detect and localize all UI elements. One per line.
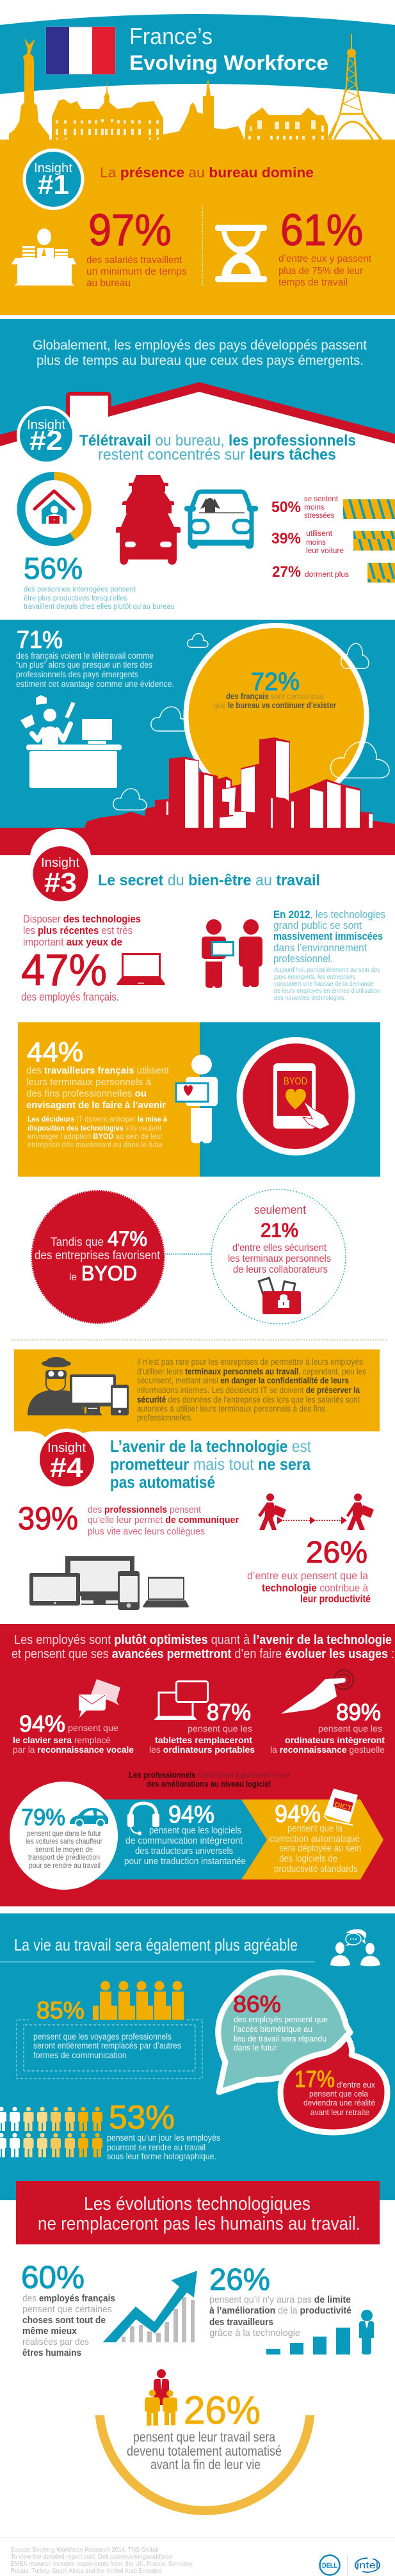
stat: 39% communicate faster: qu’elle leur permet de communiquer [88,1515,239,1525]
panel: insight 2 house [0,382,395,620]
speech bubble: 17% before retirement [280,2036,387,2132]
stat: 26% productivity [247,1536,371,1605]
statement text: plus de temps au bureau que ceux des pays émergents. [36,353,364,368]
icon: red cars in traffic [116,475,181,565]
stat: 26% productivity: technologie contribue à [262,1582,369,1594]
callout: only 21% secure devices: les terminaux personnels [228,1253,331,1264]
heading [79,432,356,463]
footer sources: To view the detailed report visit: Dell.com/evolvingworkforce [10,2554,173,2561]
stat: 94% translators: de communication intègreront [125,1835,243,1846]
stat: 44%: des fins professionnelles ou [26,1088,147,1099]
icon: dictionary [324,1789,358,1825]
stat: 87% tablets: tablettes remplaceront [155,1735,252,1745]
panel: global office time statement [0,319,395,447]
icon: dictionary: DICT [334,1801,353,1813]
stat: 47%: des employés français. [21,990,119,1003]
stat: 61%: d’entre eux y passent [278,254,372,264]
stat: 60% better done by humans: pensent que certaines [22,2304,112,2315]
callout: 79% driverless cars: 79% [21,1804,65,1830]
stat: 94% voice recognition: 94% [19,1711,65,1737]
heading: Télétravail ou bureau, les professionnels [79,432,356,449]
icon: BYOD phone in circle [239,1040,352,1152]
badge: insight 1 [23,149,85,210]
icon: travellers with suitcases [93,1981,184,2020]
text: latest technologies [23,913,141,948]
arc under stat [95,2415,315,2515]
stat: 94% autocorrect: 94% [275,1801,321,1828]
badge: insight 4 [36,1429,97,1490]
speech bubble: 17% before retirement: deviendra une réalité [303,2098,375,2107]
stat: 94% autocorrect: productivité standards [274,1864,358,1874]
stat: 94% translators: pour une traduction instantanée [124,1856,246,1867]
city skyline [0,737,395,855]
stat: 44%: 44% [27,1037,83,1068]
icon: message bubbles [79,1679,120,1718]
stat: 39% communicate faster: des professionnels pensent [88,1504,202,1515]
stat: 56%: travaillent depuis chez elles plutôt qu’au bureau [24,603,175,611]
text: software improvements [129,1771,290,1789]
stat: 85% business travel: formes de communication [33,2050,127,2060]
stat: 50% less stressed: stressées [304,512,334,520]
callout: 79% driverless cars: pour se rendre au travail [29,1861,101,1870]
stat: 94% translators: 94% [168,1801,214,1828]
panel: security warning [14,1349,380,1437]
icon: gesture touch [281,1670,353,1714]
text: 2012 consumer technologies: professionnel. [273,953,333,965]
badge: insight 2: #2 [29,426,63,456]
stat: 94% voice recognition: le clavier sera remplacé [13,1735,111,1745]
speech bubble: 86% biometric: des employés pensent que [234,2015,328,2024]
stat: 44%: envisagent de le faire à l’avenir [26,1100,166,1111]
stat: 71% [16,627,174,689]
stat: 60% better done by humans: réalisées par des [22,2337,89,2347]
stat: 87% tablets: pensent que les [188,1723,252,1734]
stat: 71%: professionnels des pays émergents [16,670,138,679]
icon: BYOD phone in circle: BYOD [284,1076,307,1087]
text: 2012 consumer technologies: des nouvelles technologies. [274,995,346,1002]
callout: 47% of companies favour BYOD: Tandis que [51,1236,104,1248]
stat: 27% sleep more [272,563,395,583]
stat: 85% business travel: pensent que les voyages professionnels [33,2032,172,2041]
speech bubble: 86% biometric: dans le futur [234,2043,277,2052]
callout: 47% of companies favour BYOD [32,1191,164,1323]
text: 2012 consumer technologies [273,908,385,1002]
title: France’s [129,23,213,49]
icon: device set [29,1556,189,1610]
callout: 79% driverless cars: pensent que dans le futur [27,1829,101,1838]
stat: 94% voice recognition: pensent que [68,1723,118,1733]
clouds [113,634,389,810]
stat: 26% productivity: leur productivité [300,1593,371,1605]
text: 2012 consumer technologies: Aujourd’hui, particulièrement au sein des [274,967,380,974]
stat: 44%: disposition des technologies s’ils veulent [28,1125,162,1132]
gold insight 1 panel [0,34,395,315]
stat: 94% voice recognition: par la reconnaissance vocale [13,1744,134,1755]
stat: 71%: 71% [17,627,63,654]
heading: restent concentrés sur leurs tâches [98,446,336,463]
stat: 26% no limit: des travailleurs [209,2317,273,2328]
callout: only 21% secure devices: de leurs collaborateurs [233,1264,328,1275]
stat: 94% voice recognition [13,1711,134,1755]
panel heading: et pensent que ses avancées permettront d’en faire évoluer les usages : [12,1647,394,1661]
callout: only 21% secure devices: seulement [254,1203,306,1216]
stat: 56% [24,551,175,611]
icon: headset [127,1803,159,1835]
text: 2012 consumer technologies: de leurs employés en termes d’utilisation [274,988,380,995]
heading: insight 4 [110,1437,312,1492]
stat: 50% less stressed: moins [304,504,325,511]
stat: 44%: entreprise dès maintenant ou dans le futur [28,1141,163,1149]
stat: 26% no limit: pensent qu’il n’y aura pas de limite [209,2294,351,2305]
icon: blue car with stressed driver [184,492,258,549]
speech bubble: 86% biometric: 86% [233,1991,281,2017]
stat: 53% holograms [0,2099,220,2161]
stat: 27% sleep more: 27% [272,563,301,581]
speech bubble: 86% biometric: lieu de travail sera répandu [234,2034,326,2043]
stat: 89% gesture [270,1699,385,1755]
badge: insight 2 [17,406,76,465]
stat: 53% holograms: sous leur forme holographique. [107,2152,216,2161]
stat: 61%: plus de 75% de leur [278,266,364,277]
stat: 94% autocorrect: des logiciels de [279,1853,337,1864]
banner: humans not replaced: Les évolutions technologiques [84,2194,310,2214]
statement text [33,338,367,368]
icon: hourglass [215,225,267,282]
badge: insight 1: Insight [34,161,72,175]
stat: 94% autocorrect: pensent que la [287,1823,343,1834]
stat: 97%: un minimum de temps [86,266,187,277]
callout: only 21% secure devices [211,1189,346,1324]
title [129,23,328,74]
stat: 87% tablets: les ordinateurs portables [149,1744,255,1755]
stat: 94% autocorrect: correction automatique [270,1833,360,1844]
stat: 26% automated before end of life: avant la fin de leur vie [150,2458,261,2472]
banner: humans not replaced [16,2181,380,2244]
footer sources [10,2547,193,2575]
stat: 72%: que le bureau va continuer d’exister [214,701,336,710]
title: Evolving Workforce [129,51,328,74]
stat: 97%: des salariés travaillent [86,255,182,266]
stat: 26% productivity: d’entre eux pensent que la [247,1570,369,1582]
stat: 53% holograms: pourront se rendre au travail [107,2143,206,2152]
panel: 44% BYOD [18,1022,380,1177]
badge: insight 3: #3 [44,867,77,898]
stat: 89% gesture: pensent que les [318,1723,382,1734]
badge: insight 4: #4 [50,1453,83,1483]
stat: 94% autocorrect [270,1801,361,1874]
header banner [0,14,395,94]
stat: 26% no limit: 26% [209,2263,270,2297]
logo: Dell: DELL [322,2562,337,2570]
heading: insight 4: prometteur mais tout ne sera [110,1454,310,1474]
stat: 60% better done by humans: des employés français [22,2293,115,2304]
badge: insight 2: Insight [27,418,65,432]
badge: insight 3 [30,829,91,901]
stat: 94% translators: pensent que les logiciels [149,1825,241,1836]
dotted text box [17,2020,202,2079]
stat: 27% sleep more: dorment plus [305,571,349,579]
callout: 79% driverless cars [10,1782,118,1890]
logo: Intel [355,2558,380,2572]
stat: 50% less stressed [271,495,395,520]
stat: 97%: au bureau [86,278,131,289]
text: security paragraph: sécurité des données de l’entreprise dès lors que les salariés sont [137,1395,360,1405]
text: 2012 consumer technologies: dans l’environnement [273,942,367,954]
stat: 26% automated before end of life: 26% [184,2388,261,2432]
badge: insight 4: Insight [47,1441,86,1455]
chart: rising arrow and bars [102,2271,197,2342]
icon: rows of employees [0,2107,102,2157]
panel: insight 3 well-being [12,829,388,1610]
stat: 44%: des travailleurs français utilisent [26,1065,170,1076]
stat: 50% less stressed: se sentent [304,495,339,503]
stat: 39% drive less: moins [306,539,326,547]
stat: 89% gesture: ordinateurs intègreront [285,1735,385,1745]
text: latest technologies: les plus récentes est très [23,924,133,937]
icon: walking people with dotted arrows [258,1493,374,1530]
stat: 39% communicate faster: plus vite avec leurs collègues [88,1526,205,1537]
logo: Dell [320,2556,339,2575]
stat: 60% better done by humans: êtres humains [22,2347,81,2358]
statement text: Globalement, les employés des pays développés passent [33,338,367,353]
stat: 97%: 97% [88,205,172,255]
stat: 53% holograms: pensent qu’un jour les employés [107,2133,220,2143]
text: security paragraph: autorisés à utiliser leurs terminaux personnels à des fins [137,1404,325,1413]
icon: worker at desk [12,229,76,286]
stat: 60% better done by humans: choses sont tout de [22,2315,106,2326]
text: software improvements: des améliorations au niveau logiciel [147,1780,271,1789]
stat: 50% less stressed: 50% [271,499,301,516]
stat: 60% better done by humans: 60% [21,2260,85,2295]
stat: 39% drive less: leur voiture [306,547,344,555]
logo: Intel: intel [357,2560,378,2571]
arrow: blue communication software [64,1799,267,1880]
text: security paragraph: d’utiliser leurs terminaux personnels au travail, cependant, peu les [137,1367,366,1376]
stat: 44%: leurs terminaux personnels à [26,1077,152,1088]
heading: insight 4: pas automatisé [110,1472,215,1492]
footer sources: Source: Evolving Workforce Research 2014, TNS Global [10,2547,159,2554]
panel heading [12,1633,394,1661]
text: security paragraph: informations internes. Les décideurs IT se doivent de préserver la [137,1385,360,1395]
stat: 26% automated before end of life: pensent que leur travail sera [133,2430,275,2445]
sun circle with 72% stat [186,625,366,806]
stat: 72%: des français sont convaincus [226,692,323,701]
stat: 26% no limit: à l’amélioration de la productivité [209,2305,351,2316]
stat: 39% drive less: utilisent [306,530,333,538]
icon: two people with tablet [202,919,262,988]
heading: insight 4: L’avenir de la technologie est [110,1437,312,1456]
stat: 71%: “un plus” alors que presque un tiers des [16,660,152,670]
callout: only 21% secure devices: d’entre elles sécurisent [232,1243,327,1253]
stat: 56%: des personnes interrogées pensent [24,586,136,593]
arrow: gold autocorrect [241,1789,383,1880]
speech bubble: 17% before retirement: 17% [294,2066,335,2092]
footer sources: Russia, Turkey, South Africa and the United Arab Emirates [10,2568,161,2575]
stat: 94% autocorrect: sera déployée au sein [279,1843,361,1854]
stat: 39% drive less: 39% [271,530,301,547]
text: 2012 consumer technologies: En 2012, les technologies [273,908,385,921]
house roof [0,382,395,446]
callout: 79% driverless cars: les voitures sans chauffeur [26,1837,102,1846]
stat: 61% [278,205,372,288]
stat: 89% gesture: la reconnaissance gestuelle [270,1744,385,1755]
speech bubble: 86% biometric [218,1972,350,2092]
stat: 56%: 56% [24,551,83,585]
icon: laptop [117,954,165,985]
text: latest technologies: Disposer des technologies [23,913,141,925]
text: security paragraph [137,1357,366,1422]
icon: person with tablet [176,1055,218,1143]
callout: 47% of companies favour BYOD: 47% [108,1227,147,1250]
chart: step bars with person [266,2310,374,2355]
stat: 61%: 61% [280,205,363,255]
stat: 71%: estiment cet avantage comme une évidence. [16,679,174,689]
text: security paragraph: sécurisent, mettant ainsi en danger la confidentialité de leurs [137,1376,349,1385]
callout: 47% of companies favour BYOD: des entreprises favorisent [35,1249,161,1262]
stat: 53% holograms: 53% [109,2099,175,2136]
stat: 72% [214,668,336,710]
stat: 85% business travel [17,1981,202,2079]
stat: 26% automated before end of life: devenu totalement automatisé [127,2444,282,2459]
stat: 47%: 47% [21,945,107,995]
footer sources: EMEA research includes respondents from: the UK, France, Germany, [10,2561,193,2568]
callout: 79% driverless cars: transport de prédilection [28,1853,100,1862]
callout: 47% of companies favour BYOD: le [69,1272,77,1283]
stat: 39% communicate faster [18,1501,239,1537]
text: security paragraph: professionnelles. [137,1413,193,1422]
stat: 94% translators [124,1801,246,1867]
icon: red leader with gold colleagues [145,2369,177,2426]
stat: 72%: 72% [251,668,300,696]
stat: 39% communicate faster: 39% [18,1501,78,1536]
stat: 89% gesture: 89% [336,1699,381,1725]
chart: 56% donut with home worker [21,476,87,542]
stat: 26% no limit: grâce à la technologie [209,2328,300,2339]
badge: insight 3: Insight [41,856,79,870]
stat: 44% [26,1037,170,1149]
icon: people chatting [330,1929,380,1967]
stat: 87% tablets: 87% [207,1699,251,1725]
heading: La présence au bureau domine [100,165,314,181]
callout: only 21% secure devices: 21% [261,1219,298,1241]
stat: 94% translators: des traducteurs universels [135,1846,233,1856]
stat: 85% business travel: seront entièrement remplacés par d’autres [33,2041,181,2050]
text: software improvements: Les professionnels s’attendent également à voir [129,1771,290,1780]
panel heading: Les employés sont plutôt optimistes quant à l’avenir de la technologie [14,1633,392,1647]
stat: 39% drive less [271,530,395,555]
stat: 56%: être plus productives lorsqu’elles [24,595,127,602]
speech bubble: 17% before retirement: d’entre eux [337,2080,375,2089]
stat: 26% no limit [209,2263,351,2339]
icon: car [70,1808,108,1827]
text: security paragraph: Il n’est pas rare pour les entreprises de permettre à leurs employés [137,1357,363,1367]
stat: 85% business travel: 85% [36,1997,85,2024]
banner: humans not replaced: ne remplaceront pas les humains au travail. [38,2214,360,2234]
panel: teleworking perception and city [0,620,395,855]
panel: optimism about technology [0,1624,395,1906]
stat: 71%: des français voient le télétravail comme [16,651,154,661]
skyline of Paris landmarks [9,34,382,140]
stat: 97% [86,205,187,289]
text: 2012 consumer technologies: grand public se sont [273,919,362,931]
icon: locked briefcase with phones [259,1278,301,1314]
icon: juggling office worker at desk [20,695,122,788]
speech bubble: 17% before retirement: avant leur retraite [310,2107,369,2117]
stat: 60% better done by humans [21,2260,115,2358]
icon: laptop and tablet [154,1681,207,1720]
speech bubble: 86% biometric: l’accès biométrique au [234,2024,312,2034]
stat: 44%: Les décideurs IT doivent anticiper la mise à [28,1116,168,1123]
stat: 60% better done by humans: même mieux [22,2326,77,2337]
stat: 26% productivity: 26% [306,1536,367,1570]
callout: 47% of companies favour BYOD: BYOD [81,1262,137,1285]
callout: 79% driverless cars: seront le moyen de [35,1845,93,1854]
text: latest technologies: important aux yeux de [23,936,122,948]
heading: La vie au travail sera également plus agréable [14,1935,298,1954]
panel: more pleasant work life [0,1913,395,2200]
stat: 44%: envisager l’adoption BYOD au sein de leur [28,1133,163,1141]
icon: French flag [46,27,115,74]
stat: 61%: temps de travail [278,277,348,288]
text: 2012 consumer technologies: constatent une hausse de la demande [274,981,374,988]
heading: Le secret du bien-être au travail [98,872,320,889]
stat: 26% automated before end of life [127,2388,282,2472]
stat: 87% tablets [149,1699,255,1755]
badge: insight 1: #1 [38,170,69,200]
speech bubble: 17% before retirement: pensent que cela [309,2089,369,2098]
icon: hacker with devices [28,1357,129,1415]
text: 2012 consumer technologies: pays émergents, les entreprises [274,974,355,981]
